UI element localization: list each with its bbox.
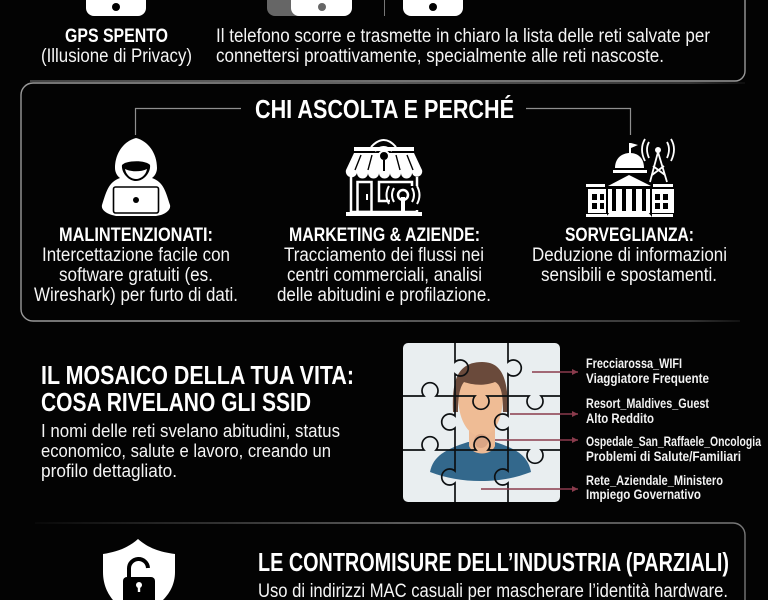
- text: marketing e aziende: delle abitudini e profilazione.: [277, 285, 491, 306]
- text: sorveglianza: sensibili e spostamenti.: [541, 265, 717, 286]
- text: mosaico description: [41, 420, 340, 481]
- heading: mosaico: [41, 360, 354, 417]
- divider: [384, 0, 385, 16]
- text: phone broadcast explanation: connettersi proattivamente, specialmente alle reti nascoste.: [216, 46, 664, 67]
- illustration: puzzle portrait: [403, 343, 560, 502]
- label: frecciarossa: Viaggiatore Frequente: [586, 371, 709, 386]
- panel: top section content: [41, 0, 711, 67]
- icon: hooded hacker: [102, 138, 170, 216]
- text: sorveglianza: [532, 225, 727, 286]
- label: rete aziendale: [586, 473, 723, 502]
- label: rete aziendale: Impiego Governativo: [586, 487, 701, 502]
- text: sorveglianza: SORVEGLIANZA:: [565, 225, 694, 246]
- panel: contromisure: [35, 523, 745, 600]
- text: mosaico description: I nomi delle reti svelano abitudini, status: [41, 420, 340, 441]
- heading: mosaico: IL MOSAICO DELLA TUA VITA:: [41, 360, 354, 390]
- label: ospedale: Problemi di Salute/Familiari: [586, 449, 741, 464]
- text: marketing e aziende: Tracciamento dei flussi nei: [284, 245, 484, 266]
- heading: chi ascolta e perché: [136, 94, 630, 135]
- text: malintenzionati: software gratuiti (es.: [59, 265, 213, 286]
- text: GPS spento: GPS SPENTO: [65, 26, 168, 47]
- icon: phone transmitting: [403, 0, 463, 16]
- text: marketing e aziende: centri commerciali, analisi: [287, 265, 482, 286]
- panel: chi ascolta e perché: [21, 83, 745, 321]
- label: frecciarossa: Frecciarossa_WIFI: [586, 356, 682, 371]
- text: malintenzionati: Wireshark) per furto di dati.: [34, 285, 238, 306]
- text: malintenzionati: [34, 225, 238, 306]
- text: mosaico description: economico, salute e lavoro, creando un: [41, 440, 331, 461]
- label: ospedale: [586, 434, 761, 464]
- text: malintenzionati: MALINTENZIONATI:: [59, 225, 213, 246]
- heading: mosaico: COSA RIVELANO GLI SSID: [41, 387, 311, 417]
- icon: shield with open lock: [103, 539, 175, 600]
- heading: chi ascolta e perché: CHI ASCOLTA E PERCHÉ: [255, 94, 514, 124]
- icon: phone scanning: [267, 0, 352, 16]
- arrow: rete aziendale: [481, 488, 578, 490]
- label: rete aziendale: Rete_Aziendale_Ministero: [586, 473, 723, 488]
- text: GPS spento: (Illusione di Privacy): [41, 46, 192, 67]
- text: mosaico description: profilo dettagliato.: [41, 460, 177, 481]
- arrow: resort: [510, 413, 578, 415]
- arrow: frecciarossa: [532, 371, 578, 373]
- text: sorveglianza: Deduzione di informazioni: [532, 245, 727, 266]
- panel: top section outline: [30, 0, 745, 81]
- label: resort: [586, 396, 709, 426]
- text: phone broadcast explanation: [216, 26, 711, 67]
- label: resort: Resort_Maldives_Guest: [586, 396, 709, 411]
- text: GPS spento: [41, 26, 192, 67]
- text: marketing e aziende: MARKETING & AZIENDE:: [289, 225, 480, 246]
- text: marketing e aziende: [277, 225, 491, 306]
- label: resort: Alto Reddito: [586, 411, 654, 426]
- section: il mosaico della tua vita: [41, 343, 761, 502]
- arrow: ospedale: [495, 439, 578, 441]
- icon: government building with antenna: [586, 139, 674, 217]
- icon: shop with wifi: [346, 140, 422, 216]
- text: phone broadcast explanation: Il telefono scorre e trasmette in chiaro la lista delle reti salvate per: [216, 26, 711, 47]
- label: frecciarossa: [586, 356, 709, 386]
- text: malintenzionati: Intercettazione facile con: [42, 245, 230, 266]
- icon: phone GPS off: [86, 0, 146, 16]
